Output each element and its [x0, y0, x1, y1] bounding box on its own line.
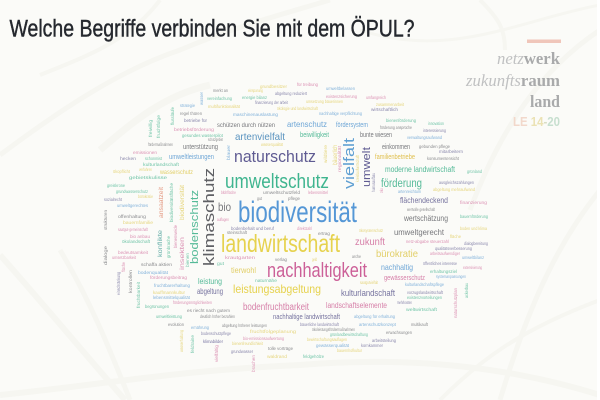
word: flächendeckend: flächendeckend — [400, 196, 448, 205]
word: umweltleistungen: umweltleistungen — [169, 154, 214, 161]
small words: center and right area: dialogbereitung — [464, 241, 488, 246]
small words: top area: merkt an — [213, 88, 228, 93]
small words: center and right area: geld — [312, 257, 317, 262]
logo: netzwerk zukunftsraum land: netzwerk — [497, 49, 561, 68]
small words: left area: ökolandschaft — [122, 239, 151, 244]
small vertical words: grünbrache — [166, 236, 171, 258]
small words: top area: innovation — [428, 121, 444, 126]
word: tierwohl: tierwohl — [231, 265, 256, 275]
word: nachhaltige landwirtschaft: nachhaltige landwirtschaft — [273, 312, 341, 321]
small words: center and right area: krautgarten — [225, 255, 256, 260]
small words: center and right area: abgeltung für erhaltung — [354, 314, 395, 319]
small vertical words: dialoge — [103, 245, 108, 265]
small words: top area: abgeltung reduziert — [275, 91, 308, 96]
small words: center and right area: qualitätsverbesserung — [435, 246, 472, 251]
small vertical words: fruchtfolge — [156, 115, 161, 138]
word: wertschätzung: wertschätzung — [403, 214, 448, 223]
word: bewilligkeit: beiwilligkeit — [300, 130, 330, 139]
small vertical words: bäuerlich — [333, 145, 339, 165]
word: leistung: leistung — [198, 277, 222, 286]
small words: top area: verwaltungsaufwand — [407, 135, 442, 140]
small words: left area: bedeutsamkeit — [118, 250, 149, 255]
small words: left area: hecken — [120, 156, 136, 161]
small words: top area: umsetzung bäuerinnen — [306, 99, 343, 104]
small vertical words: regionalität — [337, 145, 342, 172]
small words: left area: kulturlandschaft — [143, 162, 180, 167]
small words: left area: bodenschutzpflege — [201, 331, 231, 336]
small vertical words: biodiversität — [180, 185, 186, 220]
small words: center and right area: kulturlandschaftspflege — [405, 282, 444, 287]
small words: center and right area: ökosystemschutz — [359, 228, 383, 233]
small vertical words: vielfältig — [214, 345, 219, 362]
small words: top area: abgeltung mehraufwand — [433, 187, 475, 192]
small words: center and right area: naturnähe — [255, 278, 277, 283]
small words: left area: greiskrone — [107, 183, 125, 188]
small words: center and right area: fläche — [450, 234, 461, 239]
small words: center and right area: öffentliches interesse — [423, 261, 457, 266]
small vertical words: bienenweide — [173, 225, 178, 248]
small words: center and right area: steinschaft — [227, 230, 248, 235]
word: landschaftselemente: landschaftselemente — [326, 301, 387, 310]
small words: top area: umfangreich — [366, 95, 386, 100]
small words: left area: evolution — [168, 322, 184, 327]
small words: top area: grundbesitzer — [260, 84, 287, 89]
small vertical words: wasser — [199, 92, 204, 105]
small words: left area: förderungsbeitrag — [150, 275, 187, 280]
word: umweltgerecht: umweltgerecht — [394, 227, 445, 237]
word: familienbetriebe: familienbetriebe — [375, 154, 415, 161]
word: förderungen: fördersystem — [336, 122, 368, 129]
small words: left area: gesundes wasserpilot — [182, 133, 224, 138]
small words: left area: bio anbau — [130, 234, 150, 239]
small words: top area: auflagen — [217, 217, 229, 222]
logo: netzwerk zukunftsraum land: land — [530, 92, 561, 111]
word: förderung: förderung — [381, 178, 422, 190]
small words: center and right area: arche — [352, 254, 361, 259]
small words: left area: ernährung — [191, 325, 209, 330]
small words: left area: emissionen — [133, 150, 157, 155]
small vertical words: naturschutzplan — [453, 288, 458, 318]
small words: center and right area: arbeitsteilung — [372, 338, 396, 343]
small words: left area: umweltgerechtes — [117, 203, 149, 208]
word: zukunft: zukunft — [355, 236, 385, 248]
small words: top area: gut — [257, 196, 263, 201]
small words: center and right area: feldgehölze — [303, 354, 324, 359]
small words: center and right area: bodenbehalt und beruf — [231, 226, 275, 231]
small words: top area — [180, 82, 488, 222]
small words: center and right area: vorzugslandwirtschaft — [407, 290, 444, 295]
small words: center and right area: extensivierung — [463, 265, 482, 270]
small words: center and right area: gewässerqualität — [316, 343, 350, 348]
small words: left area: deutlich höher bezahlen — [200, 314, 235, 319]
word: wasserschutz: wasserschutz — [159, 169, 193, 176]
small words: center and right area — [217, 226, 488, 359]
small vertical words: fruchtbarkeit — [136, 281, 141, 308]
small words: center and right area: arbeitsaufwendiger — [430, 251, 460, 256]
word: vielfalt: vielfalt — [341, 137, 358, 189]
small words: center and right area: gut — [217, 261, 225, 266]
small words: top area: strategie — [180, 103, 195, 108]
logo: netzwerk zukunftsraum land: zukunftsraum — [465, 71, 560, 90]
small words: top area: interessierung — [423, 128, 446, 133]
word: biodiversität: biodiversität — [238, 196, 357, 229]
small words: top area: bienenförderung — [386, 118, 416, 123]
word cloud — [103, 82, 488, 372]
small words: left area: begrünungen — [145, 304, 169, 309]
small words: left area: grundwasser — [231, 349, 253, 354]
small words: left area: schonmist — [145, 156, 163, 161]
small words: left area: offenhaltung — [118, 214, 146, 219]
small vertical words: brachen — [251, 355, 256, 372]
word: artenschutz: artenschutz — [287, 120, 327, 129]
small words: top area: wasserqualität — [261, 142, 284, 147]
word: bunte wiesen: bunte wiesen — [360, 132, 392, 139]
small words: top area: wirtschaftlich — [371, 107, 398, 112]
word: nachhaltigkeit: nachhaltigkeit — [267, 260, 367, 282]
small words: center and right area: netz-abgabe steuerzahl — [406, 239, 449, 244]
small words: top area: blühfläche — [221, 190, 236, 195]
small words: left area: waldrand — [267, 354, 287, 359]
small words: left area: klimabilder — [203, 339, 223, 344]
small words: top area: energie bilanz — [242, 95, 268, 100]
word: naturschutz: naturschutz — [234, 147, 316, 166]
small words: left area: sozialrecht — [104, 197, 123, 202]
small words: center and right area: erwachsungen — [386, 330, 412, 335]
small vertical words: strukturen — [103, 210, 108, 230]
small words: top area: finanzierung — [460, 200, 487, 205]
word: bodenschutz: bodenschutz — [189, 190, 201, 264]
small vertical words: freiwillig — [148, 120, 153, 137]
small words: top area: lebensmittel — [308, 190, 328, 195]
small words: top area: existenzsicherung — [326, 94, 357, 99]
small words: center and right area: saatgutvielfalt — [360, 280, 378, 285]
small words: top area: mitarbeitern — [439, 149, 463, 154]
small words: center and right area: weltwirtschaft — [406, 307, 438, 312]
small words: left area: saatgut-gemeinschaft — [118, 227, 148, 232]
small words: left area: lebensmittelqualität — [153, 295, 191, 300]
logo: netzwerk zukunftsraum land — [465, 40, 561, 129]
small vertical words: einschränkung — [116, 272, 121, 295]
title: Welche Begriffe verbinden Sie mit dem ÖPUL? — [10, 16, 414, 42]
small words: top area: für treibung — [297, 82, 318, 87]
small words: center and right area: grünlandbewirtschaftung — [330, 332, 368, 337]
small words: left area: schutzgebiet — [208, 137, 223, 142]
small vertical words: konflikte — [157, 230, 164, 257]
small vertical words: ansaatzeit — [159, 187, 165, 218]
small words: center and right area: bäuerliche landwirtschaft — [300, 322, 340, 327]
small vertical words: wildtiere — [323, 145, 328, 163]
small words: left area: bienenfreundlichkeit — [232, 341, 264, 346]
small words: left area: bio-emissionsaufwertung — [243, 336, 284, 341]
word: klimaschutz: klimaschutz — [201, 168, 218, 266]
word: bio: bio — [218, 200, 231, 214]
small words: center and right area: bewirtschaftungsauflagen — [307, 337, 347, 342]
small words: left area: gebietskulisse — [129, 175, 168, 180]
small words: left area: bauernfamilie — [123, 220, 153, 225]
small words: left area: ökopflicht — [113, 169, 131, 174]
small vertical words: blauer — [226, 144, 231, 160]
small vertical words: insekten — [179, 236, 186, 270]
word: abgeltung: abgeltung — [197, 287, 223, 296]
small words: top area: regel thüren — [180, 111, 202, 116]
word: einkommen: einkommen — [382, 144, 410, 151]
word: schützen durch nützen: schützen durch nützen — [217, 122, 275, 129]
small words: left area: verfahren — [139, 167, 152, 172]
small words: top area: ausgleichszahlungen — [439, 180, 474, 185]
small vertical words: biodiversitätsfläche — [169, 183, 174, 222]
small words: left area: umsetzbarkeit — [112, 255, 137, 260]
word: umweltschutz: umweltschutz — [225, 171, 329, 193]
small words: top area: vereinfachung — [207, 96, 232, 101]
word: nachhaltig: nachhaltig — [381, 262, 413, 272]
small words: left area: es riecht nach gutem — [187, 308, 230, 313]
small words: left area: betriebsförderung — [174, 127, 214, 132]
small words: top area: bauernförderung — [460, 214, 488, 219]
word: artenvielfalt: artenvielfalt — [235, 131, 285, 143]
small words: top area: wertvolle gesellschaft — [407, 207, 435, 212]
small vertical words: wasserhaltung — [179, 330, 184, 352]
word: moderne landwirtschaft: moderne landwirtschaft — [385, 165, 456, 174]
small words: top area: umweltbelassen — [326, 86, 355, 91]
small words: top area: ökologie und landwirtschaft — [277, 106, 319, 111]
small vertical words: humusaufbau — [371, 173, 376, 192]
small words: left area: grundwasserschutz — [116, 189, 149, 194]
small words: left area: abgeltung höherer leistungen — [222, 323, 267, 328]
small words: top area: betriebe für — [184, 118, 207, 123]
small words: left area: schaffa aktien — [141, 262, 172, 267]
small words: left area: fördermaßnahmen — [148, 142, 173, 147]
small words: center and right area: umweltbilanz — [462, 255, 485, 260]
small vertical words — [103, 92, 469, 372]
small words: top area: förderung ansprüche — [380, 125, 412, 130]
word: gewässerschutz: gewässerschutz — [384, 273, 425, 282]
small words: left area — [104, 127, 297, 359]
small words: center and right area: systemanpassungen — [436, 274, 466, 279]
small words: top area: pflege — [288, 196, 300, 201]
word: landwirtschaft: landwirtschaft — [221, 230, 340, 258]
small words: top area: nachhaltige verpflichtung — [319, 111, 362, 116]
small words: left area: umweltleistung — [156, 314, 182, 319]
small words: top area: multifunktionalität — [208, 104, 241, 109]
small words: top area: zusammenarbeit — [376, 102, 405, 107]
small vertical words: kreislaufwirtschaft — [355, 154, 360, 182]
small words: left area: fruchtfolgeplanung — [250, 329, 297, 334]
small words: left area: bürokratie — [138, 194, 153, 199]
small vertical words: feldraine — [190, 335, 195, 353]
small words: center and right area: kornkammer — [361, 343, 383, 348]
small words: top area: einsparung — [248, 88, 263, 93]
word: bürokratie: bürokratie — [376, 248, 418, 260]
small words: left area: fruchtbarerhaltung — [154, 283, 190, 288]
small words: center and right area: mehrkosten — [397, 300, 412, 305]
small vertical words: bienen — [185, 253, 190, 267]
small words: left area: tolle vorträge — [268, 346, 293, 351]
small vertical words: flussläufe — [170, 107, 175, 125]
small words: top area: artenreichtum — [398, 189, 421, 194]
small words: center and right area: direktzahl — [297, 226, 312, 231]
small vertical words: fläche — [121, 262, 126, 272]
small words: top area: gebunden pflege — [419, 144, 450, 149]
word: leistungsabgeltung: leistungsabgeltung — [233, 282, 321, 296]
small words: top area: finanzierung der arbeit — [255, 100, 289, 105]
word: kulturlandschaft: kulturlandschaft — [341, 288, 395, 299]
small words: top area: grünland — [467, 169, 482, 174]
small words: left area: kauffmannkultur — [153, 290, 185, 295]
word: bodenfruchtbarkeit: bodenfruchtbarkeit — [243, 302, 309, 313]
small words: center and right area: ökoleistungsfördermaßnahmen — [312, 327, 355, 332]
small words: center and right area: ertrag — [318, 231, 330, 236]
small words: center and right area: multikauft — [411, 322, 429, 327]
small words: center and right area: existenzvorteilungen — [407, 295, 442, 300]
small vertical words: ackerbau — [464, 283, 469, 298]
small words: center and right area: erhaltungsziel — [430, 269, 457, 274]
small words: top area: umweltschutzfeld — [263, 190, 300, 195]
small words: top area: konsumentensicht — [427, 156, 460, 161]
small words: center and right area: verlag — [275, 257, 287, 262]
logo: netzwerk zukunftsraum land: LE 14-20 — [513, 115, 560, 129]
small words: top area: maschinenauslastung — [233, 112, 278, 117]
small vertical words: öko — [379, 188, 384, 193]
small words: left area: förderungsmöglichkeiten — [173, 300, 212, 305]
small words: center and right area: bauernhofkultur — [337, 348, 362, 353]
small vertical words: kontrollen — [128, 269, 133, 293]
word: umwelt: umwelt — [361, 147, 373, 187]
small words: center and right area: artenschutzkonzept — [359, 322, 397, 327]
word: unterstützung: unterstützung — [183, 144, 218, 151]
small words: center and right area: boden und klima — [460, 226, 487, 231]
small words: left area: bodenqualität — [138, 270, 169, 275]
